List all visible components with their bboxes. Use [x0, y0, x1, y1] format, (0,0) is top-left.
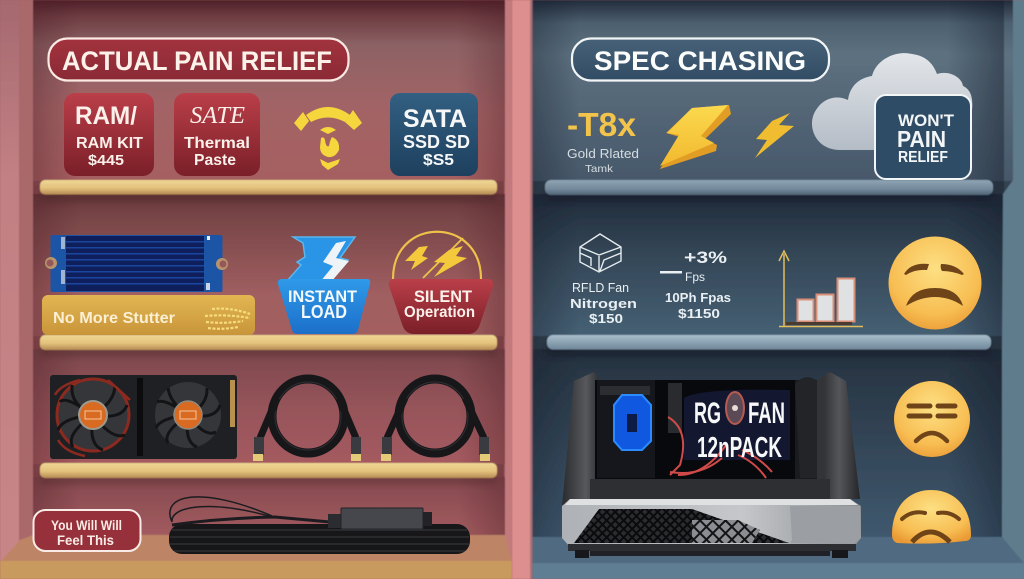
illustration: power cable bundle [169, 497, 470, 554]
case window [595, 380, 817, 479]
case label text: 12nPACK [697, 432, 782, 464]
shelf 2 [40, 335, 497, 350]
card: RAM kit: $445 [88, 152, 124, 169]
right shelf 2 [547, 335, 991, 350]
illustration: gaming PC case [562, 372, 861, 558]
card: RAM kit [64, 93, 154, 176]
heading: spec chasing [572, 38, 829, 80]
icon: cloud [812, 53, 972, 150]
badge: instant load: INSTANT [288, 288, 357, 306]
right shelf 1 [545, 180, 993, 195]
label: gold plated tank [567, 106, 639, 175]
badge: silent operation [389, 232, 493, 334]
icon: outlined box [580, 234, 621, 272]
right floor [532, 537, 1024, 579]
card: won't pain relief: WON'T [898, 111, 955, 130]
illustration: coiled cable 1 [253, 379, 361, 461]
icon: yellow signal symbol [294, 107, 362, 170]
case label text: FAN [748, 397, 785, 430]
label: gold plated tank: -T8x [567, 106, 637, 143]
bottom shelf front [0, 561, 512, 579]
card: SATA SSD [390, 93, 478, 176]
centre divider [512, 0, 532, 579]
label: no more stutter: No More Stutter [53, 310, 175, 327]
icon: small lightning bolt [755, 113, 794, 158]
card: SATA SSD: SSD SD [403, 132, 470, 152]
badge: instant load [278, 237, 370, 334]
case label text: RG [694, 397, 721, 430]
text: plus three percent fps: 10Ph Fpas [665, 291, 731, 305]
panel: actual pain relief cabinet [0, 0, 512, 579]
callout: you will feel this: You Will Will [51, 517, 122, 533]
icon: half sad face on floor [892, 490, 971, 544]
heading: actual pain relief [48, 38, 348, 80]
card: RAM kit: RAM KIT [76, 135, 143, 152]
text: fan nitrogen price: Nitrogen [570, 296, 637, 311]
text: fan nitrogen price: RFLD Fan [572, 281, 629, 295]
illustration: dual fan card [50, 375, 237, 459]
text: fan nitrogen price: $150 [589, 311, 623, 326]
callout: you will feel this: Feel This [57, 532, 114, 548]
shelf 3 [40, 463, 497, 478]
text: fan nitrogen price [570, 281, 637, 326]
illustration: NVMe heatsink [45, 235, 228, 292]
heading: actual pain relief: ACTUAL PAIN RELIEF [62, 46, 332, 76]
text: plus three percent fps: $1150 [678, 306, 720, 321]
callout: you will feel this [34, 510, 140, 551]
shelf 1 [40, 180, 497, 194]
badge: silent operation: Operation [404, 304, 475, 321]
text: plus three percent fps: Fps [685, 272, 705, 284]
lower shelf surface [0, 535, 512, 562]
text: plus three percent fps: +3% [684, 248, 727, 267]
label: gold plated tank: Tamk [585, 163, 614, 175]
case label text [694, 397, 785, 464]
card: won't pain relief: PAIN [897, 126, 946, 152]
card: thermal paste: Paste [194, 152, 236, 169]
illustration: coiled cable 2 [381, 379, 490, 461]
icon: large lightning bolt [660, 105, 731, 169]
card: SATA SSD: $S5 [423, 152, 454, 169]
card: RAM kit: RAM/ [75, 102, 137, 130]
panel: spec chasing cabinet [512, 0, 1024, 579]
card: won't pain relief [875, 95, 971, 179]
text: plus three percent fps [660, 248, 731, 321]
icon: sad face large [888, 236, 982, 330]
card: won't pain relief: RELIEF [898, 149, 948, 166]
card: SATA SSD: SATA [403, 105, 467, 133]
card: thermal paste: Thermal [184, 135, 250, 152]
heading: spec chasing: SPEC CHASING [594, 46, 806, 76]
icon: unamused face [894, 381, 970, 457]
card: thermal paste: SATE [190, 103, 245, 129]
label: gold plated tank: Gold Rlated [567, 147, 639, 161]
card: thermal paste [174, 93, 260, 176]
badge: silent operation: SILENT [414, 287, 473, 306]
badge: instant load: LOAD [301, 302, 347, 322]
chart: small fps gain bars [779, 251, 863, 326]
right wall [1002, 0, 1024, 579]
label: no more stutter [42, 295, 255, 335]
